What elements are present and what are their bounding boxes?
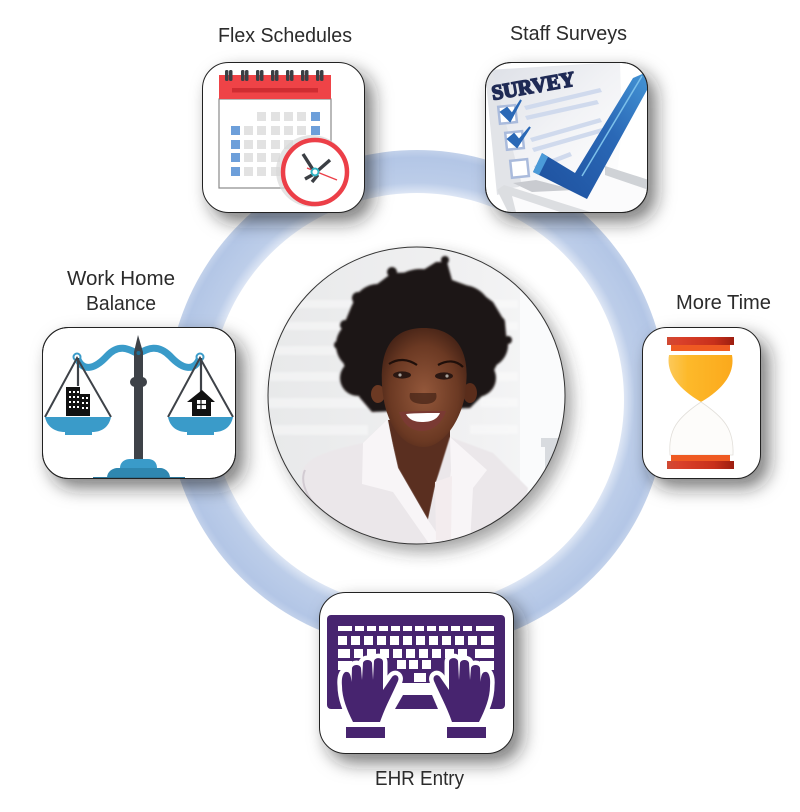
icon: hourglass bbox=[667, 337, 734, 469]
photo border bbox=[268, 247, 565, 544]
photo background bbox=[268, 248, 520, 488]
hand right bbox=[434, 658, 490, 722]
icon: hands on keyboard bbox=[327, 615, 505, 738]
card: More Time bbox=[642, 292, 771, 478]
white coat bbox=[389, 426, 528, 542]
paper left edge bbox=[485, 70, 522, 195]
card background bbox=[202, 62, 364, 212]
neck and chest bbox=[388, 420, 450, 520]
card background bbox=[642, 328, 760, 478]
card background bbox=[486, 62, 648, 212]
check shine bbox=[582, 76, 642, 176]
card: Staff Surveys bbox=[485, 23, 649, 212]
paper bbox=[487, 62, 622, 185]
label: Work Home Balance: Balance bbox=[86, 293, 156, 315]
space bar bbox=[395, 695, 438, 709]
card: Flex Schedules bbox=[202, 25, 364, 212]
label: Flex Schedules: Flex Schedules bbox=[218, 25, 352, 47]
card background bbox=[42, 328, 236, 478]
small checks bbox=[501, 100, 530, 147]
card background bbox=[320, 592, 514, 754]
seat inset bbox=[513, 180, 575, 192]
bright window frame bbox=[520, 290, 566, 530]
SURVEY heading: SURVEY bbox=[490, 67, 577, 105]
coat folds bbox=[303, 470, 353, 530]
label: More Time: More Time bbox=[676, 292, 771, 314]
card: EHR Entry bbox=[320, 592, 514, 790]
check highlight side bbox=[533, 153, 548, 175]
right cuff bbox=[447, 727, 486, 738]
face bbox=[382, 328, 467, 447]
survey lines bbox=[524, 88, 604, 170]
hand left bbox=[342, 658, 398, 722]
eyebrows bbox=[389, 360, 463, 367]
white band under keys bbox=[385, 683, 448, 710]
icon: calendar with clock bbox=[219, 70, 348, 207]
chair right arm bbox=[605, 166, 649, 190]
teeth bbox=[406, 413, 440, 422]
large check mark bbox=[533, 72, 647, 199]
window handle bbox=[541, 438, 558, 468]
nose bbox=[410, 393, 436, 404]
left cuff bbox=[346, 727, 385, 738]
icon: balance scale bbox=[45, 335, 233, 480]
card: Work Home Balance bbox=[42, 268, 236, 480]
checkboxes bbox=[498, 105, 529, 178]
label: EHR Entry: EHR Entry bbox=[375, 768, 464, 790]
seat bbox=[513, 187, 647, 212]
smile bbox=[399, 411, 446, 431]
icon: survey clipboard with check mark bbox=[485, 62, 649, 212]
hair bbox=[334, 256, 512, 412]
ring bbox=[167, 150, 667, 650]
card border bbox=[42, 328, 236, 478]
label: Staff Surveys: Staff Surveys bbox=[510, 23, 627, 45]
label: Work Home Balance: Work Home bbox=[67, 268, 175, 290]
ears bbox=[371, 385, 384, 403]
photo: smiling clinician bbox=[268, 247, 566, 545]
shirt collar bbox=[435, 476, 452, 540]
eyes bbox=[393, 371, 453, 380]
chair front bar bbox=[497, 185, 590, 212]
card border bbox=[486, 62, 648, 212]
window blinds bbox=[270, 302, 312, 434]
coat lapels bbox=[362, 420, 487, 545]
